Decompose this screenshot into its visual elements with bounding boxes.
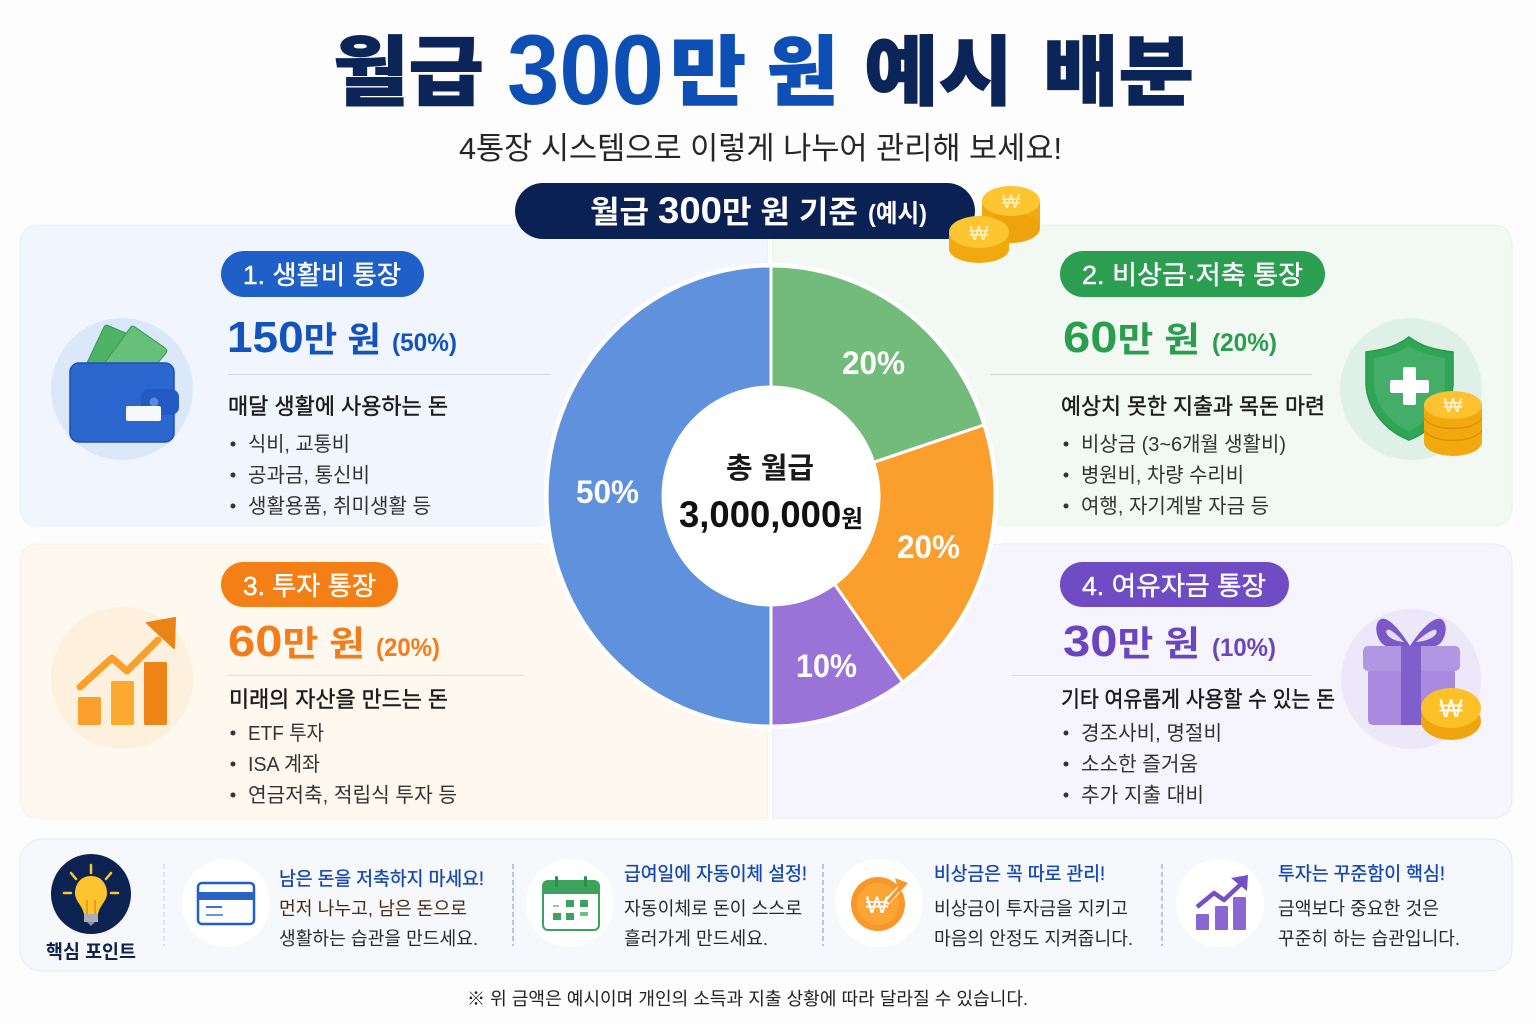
title [333, 14, 1194, 125]
donut center total [679, 452, 863, 535]
panel: 1 living expenses account [20, 225, 768, 526]
donut chart [540, 225, 1002, 818]
slice label: 10%: 10% [796, 648, 857, 684]
tip 3: 비상금은 꼭 따로 관리: 비상금은 꼭 따로 관리! [934, 863, 1105, 885]
tip 1: 남은 돈을 저축하지 마세요: 생활하는 습관을 만드세요. [279, 928, 478, 949]
amount: 30만 원: 30만 원 [1063, 617, 1200, 666]
description: 기타 여유롭게 사용할 수 있는 돈 [1061, 687, 1335, 807]
icon: purple growth chart [1196, 875, 1248, 930]
amount: 60만 원: (20%) [1212, 329, 1277, 357]
panel: 3 investment account [20, 544, 768, 818]
description: 미래의 자산을 만드는 돈 [229, 687, 457, 807]
title: 예시 [864, 31, 1013, 116]
tip 2: 급여일에 자동이체 설정 [526, 859, 807, 949]
icon: gift box with coin [1341, 609, 1481, 749]
description: 예상치 못한 지출과 목돈 마련: 여행, 자기계발 자금 등 [1081, 495, 1269, 518]
description: 예상치 못한 지출과 목돈 마련: 병원비, 차량 수리비 [1081, 464, 1244, 487]
tip 2: 급여일에 자동이체 설정: 흘러가게 만드세요. [624, 928, 768, 949]
icon: bank card [198, 883, 254, 924]
icon: gift box with coin: ₩ [1439, 695, 1463, 723]
amount: 60만 원 [1063, 313, 1277, 362]
icon: calendar [543, 876, 599, 930]
tip 1: 남은 돈을 저축하지 마세요: 먼저 나누고, 남은 돈으로 [279, 898, 467, 919]
icon: light bulb [51, 854, 131, 934]
tip 4: 투자는 꾸준함이 핵심 [1176, 859, 1460, 949]
tip 3: 비상금은 꼭 따로 관리: 비상금이 투자금을 지키고 [934, 898, 1128, 919]
description: 기타 여유롭게 사용할 수 있는 돈: 기타 여유롭게 사용할 수 있는 돈 [1061, 687, 1335, 712]
amount: 150만 원: 150만 원 [227, 313, 381, 362]
panel: 2 emergency savings account [772, 225, 1512, 526]
amount: 30만 원: (10%) [1212, 634, 1276, 662]
amount: 60만 원: (20%) [376, 634, 440, 662]
amount: 60만 원: 60만 원 [228, 617, 365, 666]
label pill: 3. 투자 통장: 3. 투자 통장 [243, 571, 376, 601]
label pill: 2. 비상금·저축 통장: 2. 비상금·저축 통장 [1082, 260, 1303, 290]
panel: 4 spare funds account [772, 544, 1512, 818]
tip 3: 비상금은 꼭 따로 관리 [835, 859, 1133, 949]
tip 2: 급여일에 자동이체 설정: 급여일에 자동이체 설정! [624, 863, 807, 885]
description: 기타 여유롭게 사용할 수 있는 돈: 추가 지출 대비 [1081, 784, 1204, 807]
description: 예상치 못한 지출과 목돈 마련: 비상금 (3~6개월 생활비) [1081, 433, 1286, 456]
label pill: 2. 비상금·저축 통장 [1060, 251, 1325, 297]
description: 미래의 자산을 만드는 돈: 미래의 자산을 만드는 돈 [229, 687, 448, 712]
header pill: 월급 300만 원 기준 [515, 183, 975, 239]
tip 4: 투자는 꾸준함이 핵심: 투자는 꾸준함이 핵심! [1278, 863, 1445, 885]
slice label: 50%: 50% [576, 474, 639, 510]
amount: 150만 원: (50%) [392, 329, 457, 357]
tip 1: 남은 돈을 저축하지 마세요 [182, 859, 484, 949]
description: 매달 생활에 사용하는 돈: 생활용품, 취미생활 등 [248, 495, 431, 518]
icon: wallet with cash [51, 318, 193, 460]
description: 기타 여유롭게 사용할 수 있는 돈: 소소한 즐거움 [1081, 753, 1198, 776]
label pill: 3. 투자 통장 [221, 562, 398, 607]
amount: 30만 원 [1063, 617, 1276, 666]
icon: gold won coins [949, 186, 1040, 263]
header pill: 월급 300만 원 기준: (예시) [868, 200, 927, 228]
icon: won coin with arrow [851, 877, 908, 931]
description: 예상치 못한 지출과 목돈 마련: 예상치 못한 지출과 목돈 마련 [1061, 394, 1325, 419]
slice label: 20% savings: 20% [842, 345, 905, 381]
label pill: 1. 생활비 통장: 1. 생활비 통장 [243, 260, 401, 290]
description: 매달 생활에 사용하는 돈: 공과금, 통신비 [248, 464, 370, 487]
label pill: 1. 생활비 통장 [221, 251, 424, 297]
label pill: 4. 여유자금 통장 [1060, 562, 1289, 607]
tip 3: 비상금은 꼭 따로 관리: 마음의 안정도 지켜줍니다. [934, 928, 1133, 949]
slice label: 20% investment: 20% [897, 529, 960, 565]
description: 매달 생활에 사용하는 돈: 식비, 교통비 [248, 433, 350, 456]
amount: 60만 원 [228, 617, 440, 666]
icon: shield with coins [1340, 318, 1482, 460]
description: 기타 여유롭게 사용할 수 있는 돈: 경조사비, 명절비 [1081, 722, 1222, 745]
subtitle: 4통장 시스템으로 이렇게 나누어 관리해 보세요! [459, 131, 1062, 166]
panel: key points [20, 839, 1512, 971]
description: 미래의 자산을 만드는 돈: ISA 계좌 [248, 753, 320, 776]
title: 만 [670, 31, 746, 116]
description: 매달 생활에 사용하는 돈 [228, 394, 448, 518]
label pill: 4. 여유자금 통장: 4. 여유자금 통장 [1082, 571, 1266, 601]
donut center total: 총 월급 [726, 452, 814, 485]
description: 예상치 못한 지출과 목돈 마련 [1061, 394, 1325, 518]
description: 미래의 자산을 만드는 돈: 연금저축, 적립식 투자 등 [248, 784, 457, 807]
title: 월급 [333, 31, 484, 116]
amount: 150만 원 [227, 313, 457, 362]
icon: gold won coins: ₩ [970, 223, 989, 245]
footnote: ※ 위 금액은 예시이며 개인의 소득과 지출 상황에 따라 달라질 수 있습니다. [467, 989, 1028, 1009]
description: 매달 생활에 사용하는 돈: 매달 생활에 사용하는 돈 [228, 394, 448, 419]
icon: shield with coins: ₩ [1444, 395, 1463, 417]
tip 4: 투자는 꾸준함이 핵심: 금액보다 중요한 것은 [1278, 898, 1439, 919]
icon: won coin with arrow: ₩ [866, 892, 889, 919]
title: 300 [507, 14, 664, 125]
title: 배분 [1043, 31, 1194, 116]
icon: rising bar chart [51, 607, 193, 749]
amount: 60만 원: 60만 원 [1063, 313, 1200, 362]
tip 1: 남은 돈을 저축하지 마세요: 남은 돈을 저축하지 마세요! [279, 868, 484, 890]
description: 미래의 자산을 만드는 돈: ETF 투자 [248, 722, 324, 745]
title: 원 [767, 31, 838, 116]
tip 4: 투자는 꾸준함이 핵심: 꾸준히 하는 습관입니다. [1278, 928, 1460, 949]
donut center total: 3,000,000원 [679, 494, 863, 535]
icon: gold won coins: ₩ [1002, 192, 1020, 213]
header pill: 월급 300만 원 기준: 월급 300만 원 기준 [590, 190, 858, 231]
tip 2: 급여일에 자동이체 설정: 자동이체로 돈이 스스로 [624, 898, 802, 919]
heading: 핵심 포인트: 핵심 포인트 [46, 941, 136, 963]
